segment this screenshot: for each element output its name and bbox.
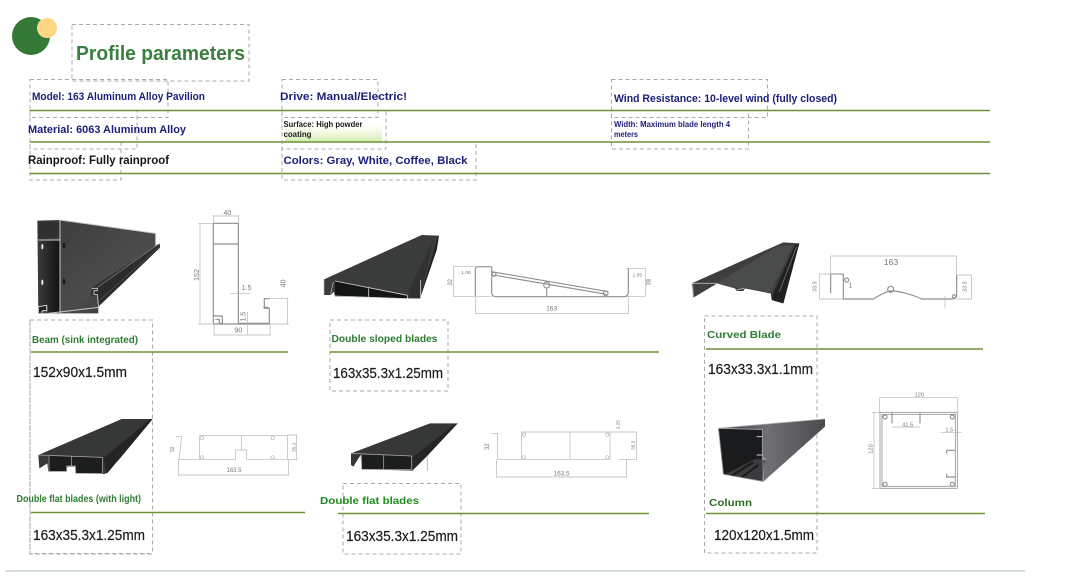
surface: coating — [284, 129, 312, 139]
flat blade section drawing: 1.25 — [615, 420, 620, 429]
column 3D render — [718, 419, 825, 482]
drive: Drive: Manual/Electric! — [280, 91, 407, 103]
curved blade section drawing: 1 — [848, 280, 852, 289]
sloped blade section drawing — [448, 267, 653, 314]
sloped blade section drawing: 32 — [448, 278, 454, 286]
curved blade section drawing — [813, 256, 972, 308]
width: meters — [614, 129, 638, 139]
flat blade section drawing: 163.5 — [554, 470, 570, 477]
surface: Surface: High powder — [284, 119, 363, 129]
curved blade rule — [706, 348, 983, 350]
parameter table — [28, 80, 990, 180]
flat blade 3D render — [351, 423, 458, 471]
title — [72, 24, 249, 81]
parameter rules — [30, 110, 990, 174]
beam section drawing: 152 — [194, 269, 201, 281]
beam section drawing — [194, 210, 289, 336]
sloped blade section drawing: 1.06 — [461, 270, 471, 276]
material: Material: 6063 Aluminum Alloy — [28, 124, 187, 136]
sloped blade section drawing: 163 — [546, 306, 558, 313]
flat blade dimensions: 163x35.3x1.25mm — [346, 529, 458, 545]
profile: curved blade — [692, 242, 983, 553]
curved blade name: Curved Blade — [707, 329, 781, 341]
bottom divider — [5, 570, 1025, 572]
beam section drawing: 1.5 — [242, 285, 252, 292]
column section drawing: 1.5 — [945, 427, 953, 433]
beam section drawing: 1.5 — [241, 312, 248, 322]
rainproof: Rainproof: Fully rainproof — [28, 155, 169, 167]
flat blade with light name: Double flat blades (with light) — [16, 493, 141, 505]
beam frame — [30, 320, 152, 554]
column section drawing: 41.5 — [902, 422, 913, 428]
flat blade name: Double flat blades — [320, 495, 419, 507]
beam dimensions: 152x90x1.5mm — [33, 365, 127, 381]
header logo — [12, 17, 57, 55]
flat blade section drawing: 35.3 — [630, 440, 635, 450]
column section drawing: 120 — [915, 393, 924, 399]
sloped blade dimensions: 163x35.3x1.25mm — [333, 366, 443, 382]
sloped blade 3D render — [324, 235, 439, 299]
sloped blade section drawing: 38 — [647, 278, 653, 286]
beam section drawing: 40 — [223, 210, 231, 217]
sloped blade name: Double sloped blades — [332, 333, 438, 345]
sloped blade rule — [330, 351, 659, 353]
beam section drawing: 90 — [234, 328, 242, 335]
flat blade section drawing: 32 — [485, 443, 491, 450]
flat blade frame — [343, 484, 461, 554]
flat blade with light 3D render — [38, 419, 153, 474]
profile: double flat blades — [320, 420, 649, 554]
flat blade with light section drawing: 163.5 — [227, 468, 242, 474]
column section drawing — [869, 393, 962, 488]
flat blade with light section drawing: 35.3 — [291, 442, 296, 452]
flat blade with light dimensions: 163x35.3x1.25mm — [33, 528, 145, 544]
wind resistance: Wind Resistance: 10-level wind (fully closed) — [614, 93, 837, 105]
surface highlight patch — [285, 123, 382, 142]
beam rule — [31, 351, 288, 353]
flat blade rule — [338, 512, 649, 514]
flat blade section drawing — [485, 420, 637, 478]
column dimensions: 120x120x1.5mm — [714, 528, 814, 544]
profile: double flat blades with light — [16, 320, 305, 554]
profile: double sloped blades — [324, 235, 659, 391]
sloped blade section drawing: 1.05 — [632, 273, 642, 279]
column name: Column — [709, 497, 752, 509]
flat blade with light section drawing — [170, 435, 297, 476]
curved blade dimensions: 163x33.3x1.1mm — [708, 362, 813, 378]
column rule — [706, 512, 985, 514]
curved blade 3D render — [692, 242, 799, 303]
profile: column — [706, 393, 985, 544]
parameter dashed frames — [30, 80, 768, 180]
curved blade section drawing: 33.3 — [963, 281, 969, 292]
profile: beam — [30, 210, 289, 554]
title: Profile parameters — [76, 43, 245, 65]
flat blade with light frame — [30, 320, 152, 554]
beam 3D render — [37, 220, 160, 313]
sloped blade frame — [330, 320, 448, 391]
curved blade section drawing: 163 — [884, 257, 898, 267]
curved blade frame — [704, 316, 817, 553]
flat blade with light rule — [31, 512, 305, 514]
colors: Colors: Gray, White, Coffee, Black — [284, 155, 468, 167]
curved blade section drawing: 33.3 — [813, 281, 819, 292]
flat blade with light section drawing: 32 — [170, 446, 176, 452]
model: Model: 163 Aluminum Alloy Pavilion — [32, 91, 205, 103]
width: Width: Maximum blade length 4 — [614, 119, 730, 129]
beam name: Beam (sink integrated) — [32, 334, 138, 346]
beam section drawing: 40 — [281, 279, 288, 287]
column section drawing: 120 — [869, 444, 875, 454]
